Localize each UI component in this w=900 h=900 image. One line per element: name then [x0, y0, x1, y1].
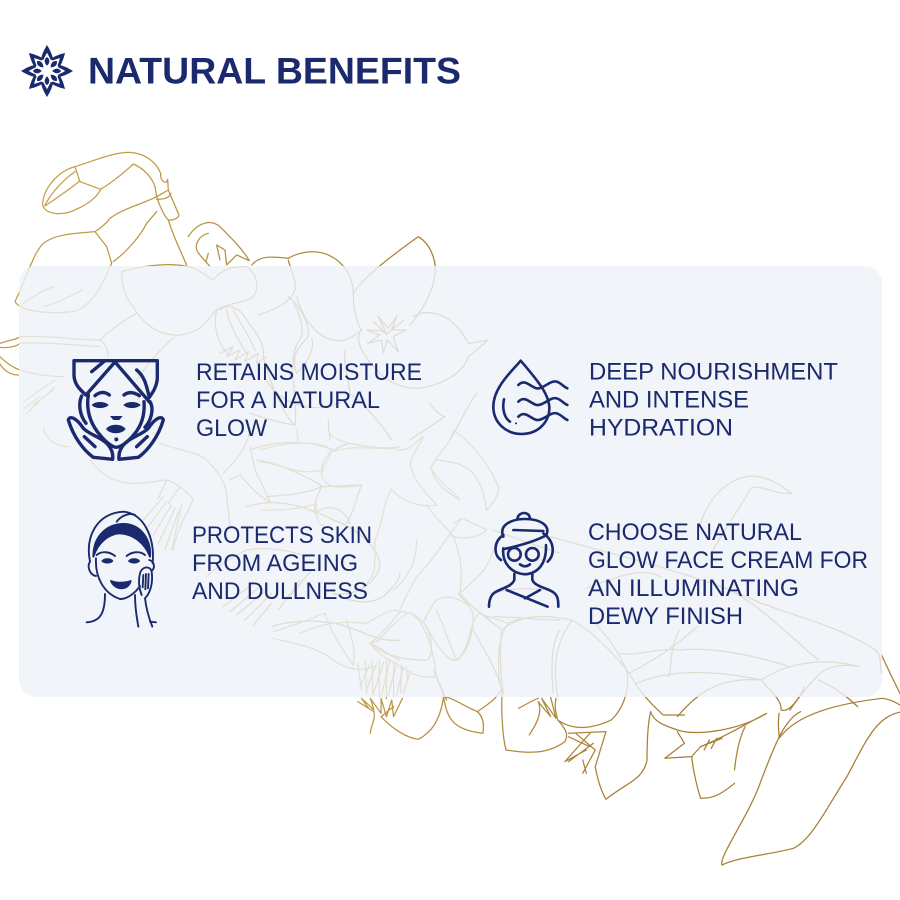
text: protects skin: FROM AGEING	[192, 550, 358, 577]
title: NATURAL BENEFITS	[88, 50, 461, 92]
flowers: lower right	[358, 476, 900, 865]
text: retains moisture: GLOW	[196, 415, 267, 442]
text: choose natural glow: GLOW FACE CREAM FOR	[588, 547, 868, 574]
flowers: centre	[260, 430, 560, 700]
panel: benefits background	[19, 266, 882, 697]
icon: face mask with hands	[68, 361, 163, 459]
text: choose natural glow: DEWY FINISH	[588, 603, 743, 630]
text: retains moisture: RETAINS MOISTURE	[196, 359, 422, 386]
text: retains moisture	[196, 359, 422, 442]
icon: header flower logo	[21, 45, 73, 97]
icon: water drop with waves	[493, 361, 567, 434]
icon: woman with towel and eye pads	[489, 513, 558, 607]
text: protects skin: PROTECTS SKIN	[192, 522, 372, 549]
text: choose natural glow: AN ILLUMINATING	[588, 575, 799, 602]
text: deep nourishment	[589, 358, 838, 442]
text: retains moisture: FOR A NATURAL	[196, 387, 380, 414]
flowers: lower left	[23, 380, 400, 660]
text: protects skin: AND DULLNESS	[192, 578, 368, 605]
floral line illustration	[0, 152, 900, 865]
text: deep nourishment: DEEP NOURISHMENT	[589, 358, 838, 386]
text: protects skin	[192, 522, 372, 605]
text: deep nourishment: AND INTENSE	[589, 386, 749, 414]
text: deep nourishment: HYDRATION	[589, 414, 733, 442]
text: choose natural glow: CHOOSE NATURAL	[588, 519, 802, 546]
flowers: upper left	[0, 152, 488, 440]
icon: woman touching cheek	[87, 512, 156, 627]
text: choose natural glow	[588, 519, 868, 630]
